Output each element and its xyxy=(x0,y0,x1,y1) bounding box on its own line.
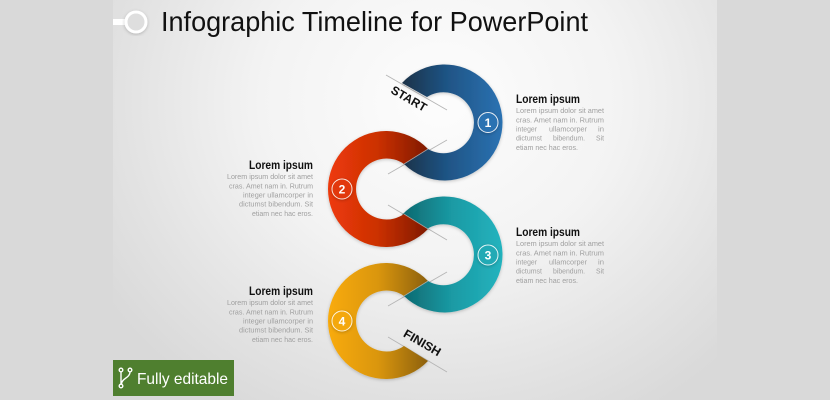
text block 3: etiam nec hac eros. xyxy=(516,276,578,285)
text block 3: ullamcorper xyxy=(549,258,587,266)
text block 1: Lorem ipsum dolor sit amet xyxy=(516,106,605,115)
text block 4: integer ullamcorper in xyxy=(243,316,313,326)
text block 3: in xyxy=(598,258,604,266)
ring 2: red xyxy=(328,131,428,247)
text block 3: dictumst xyxy=(516,267,543,276)
text block 3: Lorem ipsum dolor sit amet xyxy=(516,239,605,248)
ring 1: blue xyxy=(402,64,502,180)
text block 2: etiam nec hac eros. xyxy=(252,209,313,218)
text block 4 xyxy=(227,286,314,344)
text block 2: integer ullamcorper in xyxy=(243,190,313,200)
badge 2 xyxy=(332,179,352,199)
text block 3: integer xyxy=(516,258,537,266)
text block 3: Sit xyxy=(596,267,605,276)
finish label: FINISH xyxy=(401,326,444,359)
text block 1 xyxy=(516,94,605,152)
text block 2 xyxy=(227,160,314,218)
guide lines xyxy=(386,75,447,372)
text block 1: integer xyxy=(516,124,537,134)
text block 1: cras. Amet nam in. Rutrum xyxy=(516,115,604,124)
text block 3: cras. Amet nam in. Rutrum xyxy=(516,248,604,257)
text block 4: Lorem ipsum xyxy=(249,286,313,298)
slide panel background xyxy=(113,0,717,400)
text block 1: bibendum. xyxy=(553,134,585,143)
text block 2: cras. Amet nam in. Rutrum xyxy=(229,181,313,190)
text block 1: ullamcorper xyxy=(549,124,587,134)
text block 1: dictumst xyxy=(516,134,543,143)
badge 1 xyxy=(478,112,498,132)
badge 4: 4 xyxy=(339,314,346,328)
badge 1: 1 xyxy=(485,116,492,130)
text block 3 xyxy=(516,227,605,285)
text block 4: Lorem ipsum dolor sit amet xyxy=(227,298,314,307)
overlapping guide lines on joints xyxy=(404,149,428,296)
text block 3: Lorem ipsum xyxy=(516,227,580,239)
text block 1: Sit xyxy=(596,134,605,143)
text block 3: bibendum. xyxy=(553,267,585,276)
ring 3: teal xyxy=(402,196,502,312)
fully editable badge: Fully editable xyxy=(137,371,228,388)
text block 1: Lorem ipsum xyxy=(516,94,580,106)
text block 1: in xyxy=(598,124,604,134)
start label: START xyxy=(388,83,430,115)
header icon xyxy=(113,12,146,32)
text block 4: dictumst bibendum. Sit xyxy=(239,326,314,335)
badge 3: 3 xyxy=(485,248,492,262)
text block 1: etiam nec hac eros. xyxy=(516,143,578,152)
text block 2: Lorem ipsum dolor sit amet xyxy=(227,172,314,181)
text block 4: cras. Amet nam in. Rutrum xyxy=(229,307,313,316)
text block 4: etiam nec hac eros. xyxy=(252,335,313,344)
icon: branch xyxy=(119,368,132,388)
text block 2: Lorem ipsum xyxy=(249,160,313,172)
title: Infographic Timeline for PowerPoint xyxy=(161,6,588,37)
text block 2: dictumst bibendum. Sit xyxy=(239,200,314,209)
badge 2: 2 xyxy=(339,182,346,196)
fully editable badge xyxy=(113,360,234,396)
ring 4: orange xyxy=(328,263,428,379)
badge 3 xyxy=(478,245,498,265)
badge 4 xyxy=(332,311,352,331)
